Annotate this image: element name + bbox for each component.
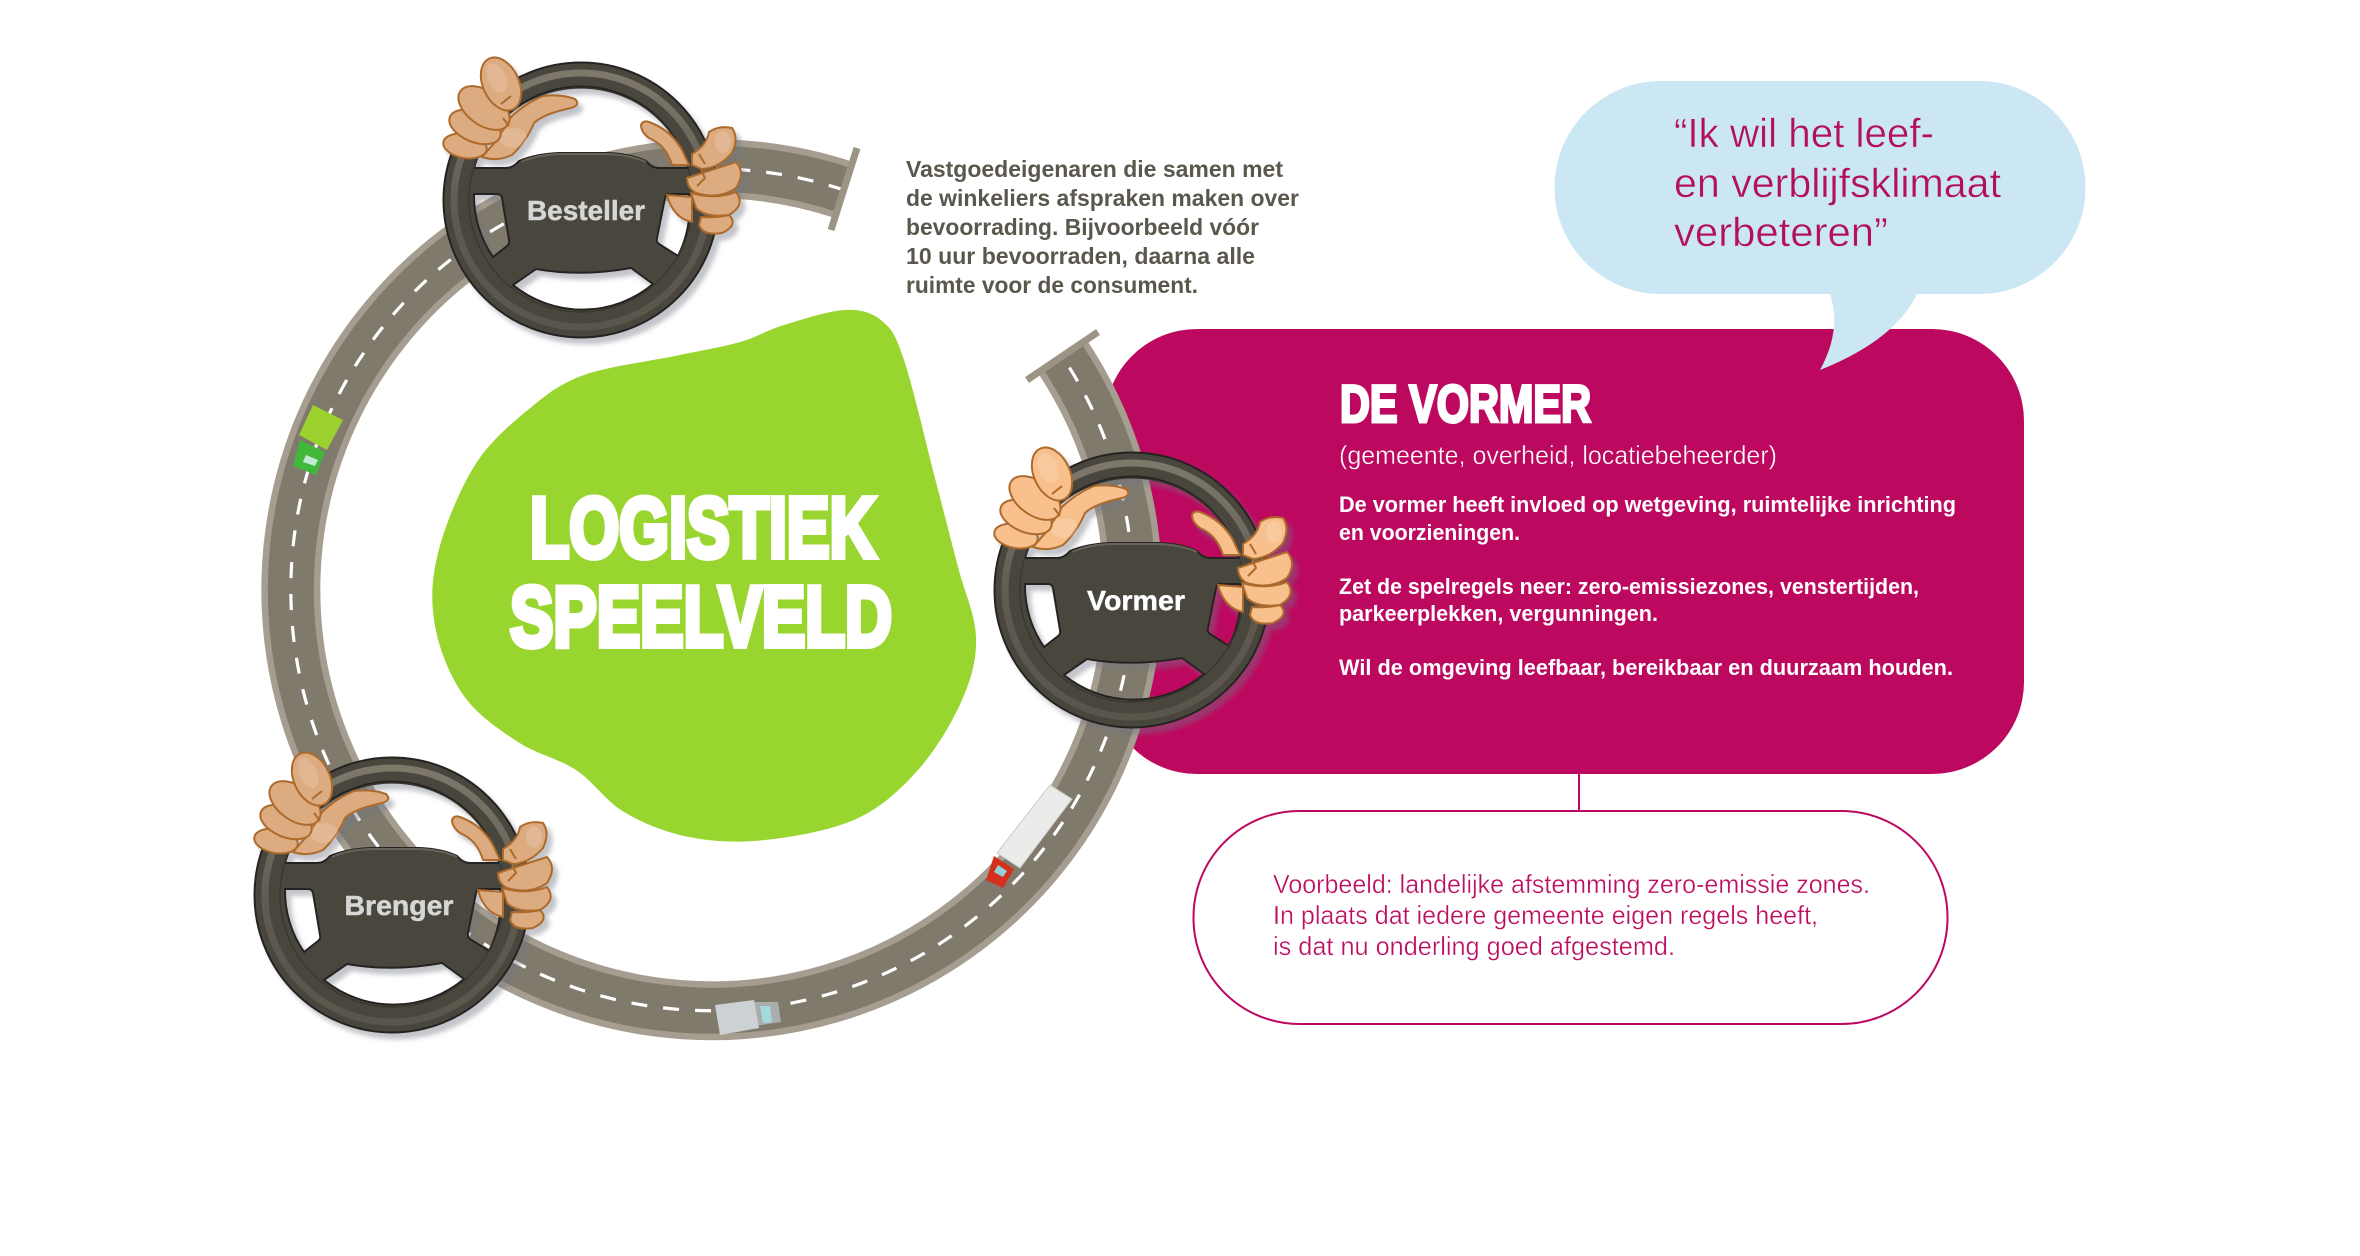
wheel with hands	[992, 441, 1292, 728]
steering wheel: Besteller	[441, 51, 741, 338]
green blob background	[432, 310, 976, 842]
heading: De Vormer: DE VORMER	[1340, 375, 1591, 434]
label: Vormer: Vormer	[1087, 585, 1185, 616]
text: Besteller description	[906, 156, 1299, 298]
speech bubble	[1555, 81, 2086, 370]
text: Vormer description: De vormer heeft invloed op wetgeving, ruimtelijke inrichting	[1339, 492, 1956, 517]
vehicle: green truck	[293, 405, 343, 475]
quote text: verbeteren”	[1674, 209, 1888, 255]
text: Vormer description: Zet de spelregels neer: zero-emissiezones, venstertijden,	[1339, 574, 1919, 599]
text: example: Voorbeeld: landelijke afstemming zero-emissie zones.	[1273, 869, 1870, 899]
title: Logistiek speelveld: LOGISTIEK	[530, 481, 876, 576]
text: Vormer description: en voorzieningen.	[1339, 520, 1520, 545]
text: example: is dat nu onderling goed afgestemd.	[1273, 931, 1675, 961]
text: Besteller description: de winkeliers afspraken maken over	[906, 185, 1299, 211]
text: Vormer description	[1339, 492, 1956, 680]
quote text: “Ik wil het leef-	[1674, 110, 1934, 156]
vehicle: white tanker with red cab	[986, 785, 1072, 888]
connector line	[1578, 773, 1580, 811]
subheading: roles: (gemeente, overheid, locatiebeheerder)	[1339, 440, 1777, 470]
quote text: en verblijfsklimaat	[1674, 160, 2002, 206]
text: Vormer description: parkeerplekken, vergunningen.	[1339, 601, 1658, 626]
vehicle: grey delivery truck	[715, 1000, 781, 1035]
panel: De Vormer	[1105, 329, 2024, 774]
wheel with hands	[252, 746, 552, 1032]
text: example: In plaats dat iedere gemeente eigen regels heeft,	[1273, 900, 1818, 930]
text: Besteller description: Vastgoedeigenaren die samen met	[906, 156, 1283, 182]
text: Vormer description: Wil de omgeving leefbaar, bereikbaar en duurzaam houden.	[1339, 655, 1953, 680]
callout: example outline	[1194, 811, 1948, 1024]
label: Besteller: Besteller	[527, 195, 645, 226]
steering wheel: Vormer	[992, 441, 1292, 728]
text: Besteller description: 10 uur bevoorraden, daarna alle	[906, 243, 1255, 269]
text: example	[1273, 869, 1870, 961]
title: Logistiek speelveld	[510, 481, 892, 665]
wheel with hands	[441, 51, 741, 338]
quote text	[1674, 110, 2002, 255]
text: Besteller description: ruimte voor de consument.	[906, 272, 1198, 298]
steering wheel: Brenger	[252, 746, 552, 1032]
road	[291, 148, 1133, 1011]
label: Brenger: Brenger	[344, 890, 454, 921]
text: Besteller description: bevoorrading. Bijvoorbeeld vóór	[906, 214, 1259, 240]
title: Logistiek speelveld: SPEELVELD	[510, 570, 892, 665]
